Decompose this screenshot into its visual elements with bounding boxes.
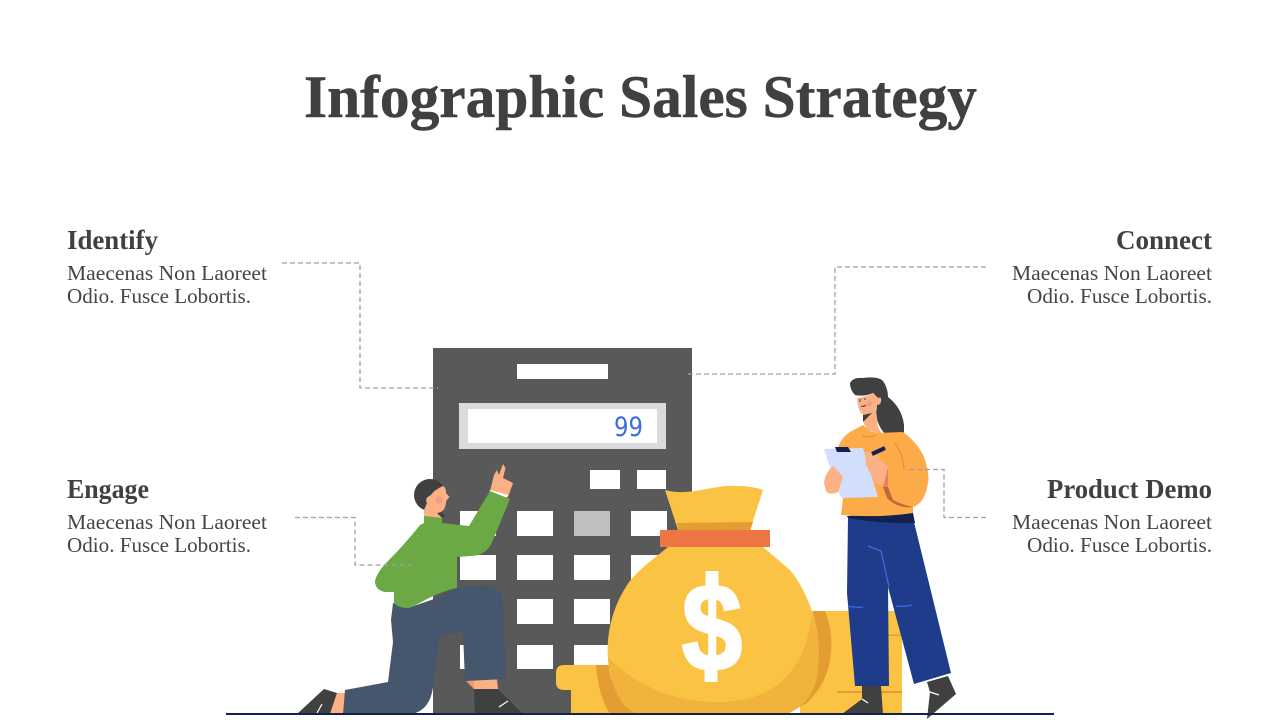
box behind money bag: [800, 611, 902, 714]
woman: clothing creases: [862, 435, 904, 469]
connector: Connect: [685, 267, 986, 374]
text block: Connect: Connect: [1116, 225, 1212, 255]
woman: trousers: [847, 517, 951, 686]
woman: trouser seams: [848, 546, 912, 607]
woman: back shoe: [927, 676, 956, 719]
man: right foot and shoe: [466, 677, 523, 714]
text block: Product Demo: Product Demo: [1047, 474, 1212, 504]
man: trousers: [343, 585, 506, 714]
dollar sign: $: [682, 558, 742, 697]
text block: Engage: [67, 474, 267, 557]
calculator: [433, 348, 692, 714]
text block: Engage: Odio. Fusce Lobortis.: [67, 533, 251, 557]
title: Infographic Sales Strategy: [304, 64, 977, 130]
connector: Identify: [282, 263, 438, 388]
text block: Engage: Maecenas Non Laoreet: [67, 510, 267, 534]
woman: waistband: [847, 513, 915, 523]
man: cuff: [489, 490, 508, 499]
calculator display: 99: [614, 412, 643, 443]
text block: Identify: Identify: [67, 225, 158, 255]
man: green sweater: [375, 491, 510, 608]
woman: hair: [850, 377, 904, 434]
text block: Connect: Odio. Fusce Lobortis.: [1027, 284, 1212, 308]
woman: left hand: [824, 466, 843, 494]
woman: orange top: [838, 425, 928, 516]
woman: front shoe: [842, 686, 883, 714]
man: hand: [490, 464, 513, 497]
text block: Connect: Maecenas Non Laoreet: [1012, 261, 1212, 285]
woman: neck and face: [857, 393, 882, 434]
text block: Identify: Maecenas Non Laoreet: [67, 261, 267, 285]
text block: Product Demo: [1012, 474, 1212, 557]
man: left foot and shoe: [297, 689, 346, 714]
woman: sleeve shadow: [883, 487, 913, 507]
connector: Engage: [295, 518, 414, 565]
calculator display: [459, 403, 666, 449]
text block: Engage: Engage: [67, 474, 149, 504]
man figure pointing at calculator: [297, 464, 523, 714]
baseline: [226, 713, 1054, 715]
text block: Connect: [1012, 225, 1212, 308]
stand under money bag: [556, 665, 620, 714]
text block: Product Demo: Maecenas Non Laoreet: [1012, 510, 1212, 534]
woman: right hand and pen: [865, 448, 888, 487]
money bag: [596, 486, 831, 714]
text block: Identify: Odio. Fusce Lobortis.: [67, 284, 251, 308]
man: hair and head: [414, 479, 450, 520]
connector: Product Demo: [905, 470, 986, 518]
text block: Identify: [67, 225, 267, 308]
woman figure with clipboard: [824, 377, 956, 719]
woman: clipboard: [824, 447, 878, 498]
calculator buttons: [460, 470, 667, 669]
text block: Product Demo: Odio. Fusce Lobortis.: [1027, 533, 1212, 557]
